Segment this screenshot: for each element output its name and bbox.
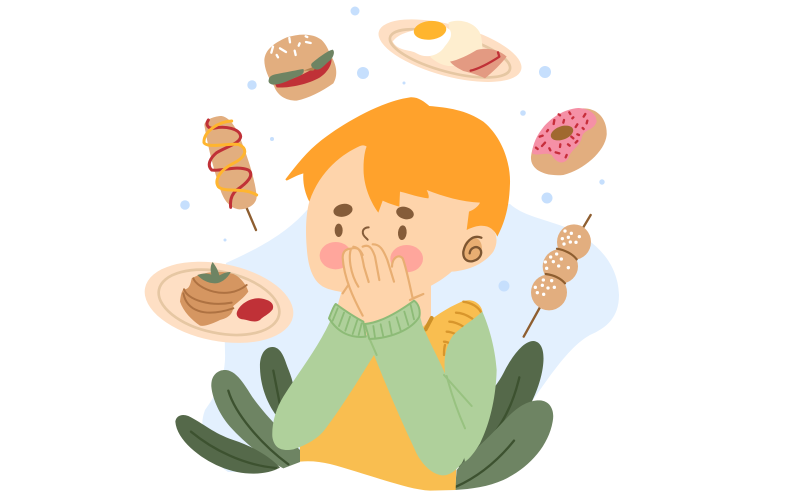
bacon <box>450 49 507 78</box>
top ball <box>557 224 591 260</box>
face and ear <box>306 140 497 297</box>
sweater and vest <box>272 300 497 491</box>
ear swirl <box>460 235 485 264</box>
herb garnish <box>197 262 231 283</box>
egg white <box>393 25 451 56</box>
plate <box>372 7 528 95</box>
right cuff <box>365 301 420 339</box>
leaf: back right <box>453 341 544 477</box>
sausage bun <box>204 116 257 209</box>
seeds <box>534 229 581 296</box>
sprinkles <box>536 112 587 157</box>
background blob <box>202 204 619 472</box>
left eye <box>335 224 343 237</box>
stick <box>244 201 256 230</box>
plate with pancakes <box>138 250 300 355</box>
neck <box>332 285 431 345</box>
bottom ball <box>531 274 567 310</box>
left eyebrow <box>332 202 354 219</box>
skewer stick <box>524 215 591 337</box>
leaf: lower left <box>175 415 280 474</box>
leaf: back left <box>260 347 294 422</box>
donut base <box>531 108 607 175</box>
middle ball <box>543 249 578 284</box>
ball dividers <box>546 249 577 283</box>
left cheek <box>320 242 352 269</box>
leaf: front right <box>455 400 553 490</box>
egg and bacon plate <box>372 7 528 95</box>
right arm <box>365 303 466 475</box>
left cuff <box>329 304 366 337</box>
right eye <box>397 225 407 240</box>
corn dog <box>204 116 257 230</box>
hair <box>285 97 510 237</box>
bun <box>264 35 336 101</box>
yellow vest body <box>300 300 483 491</box>
floating dots <box>180 6 605 292</box>
donut hole <box>549 123 575 143</box>
right eyebrow <box>395 205 415 221</box>
egg yolk <box>413 19 447 41</box>
right cheek <box>390 245 423 272</box>
plate rim <box>385 19 515 87</box>
hand <box>343 244 423 322</box>
pancakes <box>180 272 248 326</box>
donut <box>531 108 607 175</box>
vest stitching <box>444 302 481 355</box>
fold lines <box>369 338 472 428</box>
meatball skewer <box>524 215 591 337</box>
ketchup squiggle <box>207 120 251 207</box>
plate rim <box>153 260 285 345</box>
lettuce <box>269 50 334 85</box>
right sleeve shoulder <box>445 312 497 462</box>
mustard squiggle <box>204 121 257 195</box>
plants <box>175 341 553 490</box>
vest tab <box>426 318 432 329</box>
left arm <box>272 322 374 450</box>
leaf: middle left <box>211 370 300 468</box>
pink frosting <box>532 108 597 162</box>
plate <box>138 250 300 355</box>
bacon streak <box>471 52 499 71</box>
nose <box>363 227 369 240</box>
patty and tomato <box>275 57 332 88</box>
ketchup <box>237 298 273 321</box>
toast <box>430 21 483 66</box>
burger <box>264 35 336 101</box>
boy <box>272 97 510 491</box>
sesame seeds <box>271 36 311 57</box>
